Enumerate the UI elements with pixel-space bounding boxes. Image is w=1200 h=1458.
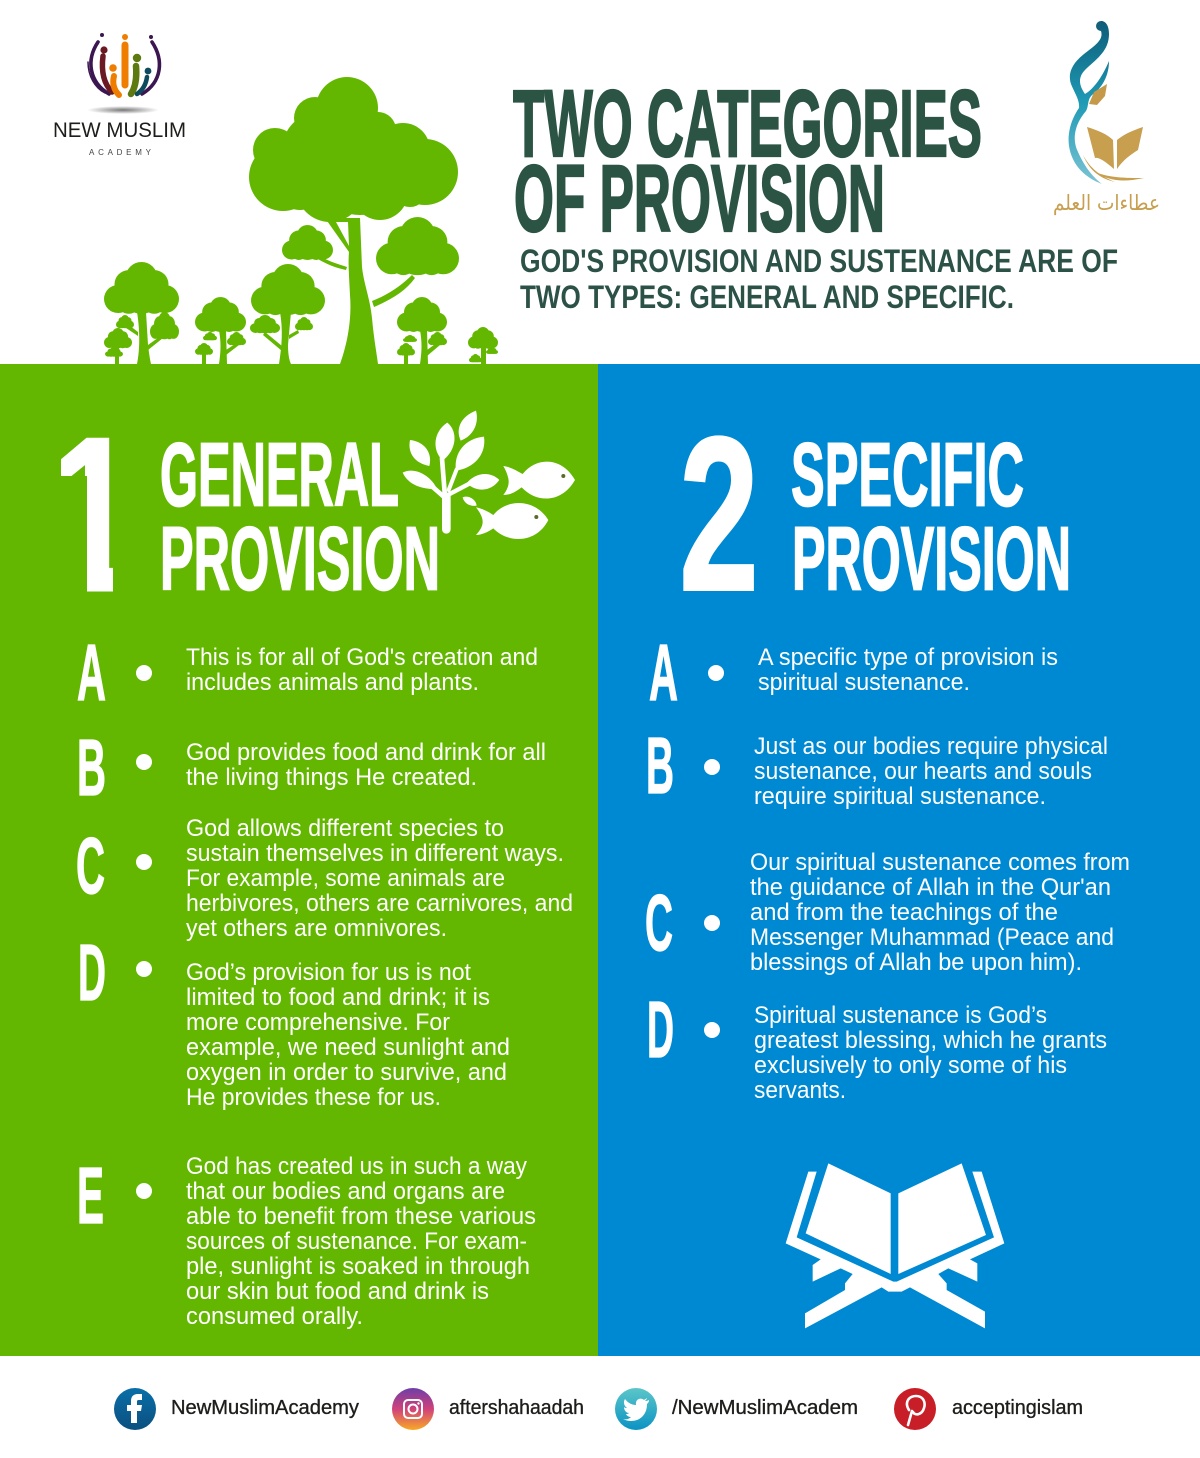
item D: He provides these for us. [186, 1084, 441, 1111]
item D: oxygen in order to survive, and [186, 1059, 507, 1086]
facebook [114, 1388, 359, 1430]
item C: and from the teachings of the [750, 899, 1058, 926]
item E: ple, sunlight is soaked in through [186, 1253, 530, 1280]
item E: able to benefit from these various [186, 1203, 536, 1230]
item E: consumed orally. [186, 1303, 363, 1330]
item B: Just as our bodies require physical [754, 733, 1108, 760]
item B: God provides food and drink for all [186, 739, 546, 766]
icon: open book on stand [786, 1163, 1004, 1328]
small tree 1 [104, 262, 179, 364]
heading: general provision: PROVISION [160, 510, 440, 610]
instagram: aftershahaadah [449, 1397, 584, 1419]
number 2: 2 [679, 391, 759, 637]
small tree 3 [250, 264, 325, 364]
item A: includes animals and plants. [186, 669, 479, 696]
small tree 5 [468, 327, 498, 364]
item A [77, 628, 538, 717]
logo shadow [87, 106, 159, 114]
item A: A [649, 628, 678, 717]
item C: sustain themselves in different ways. [186, 840, 564, 867]
item A: This is for all of God's creation and [186, 644, 538, 671]
number 1: 1 [46, 391, 140, 639]
item C: C [645, 878, 673, 967]
item C: blessings of Allah be upon him). [750, 949, 1082, 976]
item D: example, we need sunlight and [186, 1034, 510, 1061]
logo pen nib [1089, 84, 1107, 105]
heading: specific provision: SPECIFIC [791, 426, 1024, 526]
footer: social links [114, 1388, 1083, 1430]
logo calligraphy ribbon [1069, 21, 1109, 184]
illustration: trees [104, 77, 498, 364]
title line 2: OF PROVISION [514, 146, 885, 252]
item B: sustenance, our hearts and souls [754, 758, 1092, 785]
pinterest: acceptingislam [952, 1397, 1083, 1419]
item C: C [76, 821, 105, 910]
logo wordmark: NEW MUSLIM [53, 118, 186, 142]
item D: greatest blessing, which he grants [754, 1027, 1107, 1054]
facebook: NewMuslimAcademy [171, 1397, 359, 1419]
instagram [392, 1388, 584, 1430]
item D [78, 928, 510, 1111]
item C: God allows different species to [186, 815, 504, 842]
plant [403, 411, 499, 529]
logo open book [1083, 127, 1144, 182]
item C: Our spiritual sustenance comes from [750, 849, 1130, 876]
item B: require spiritual sustenance. [754, 783, 1046, 810]
item C [76, 815, 573, 942]
item C [645, 849, 1130, 976]
item B [646, 721, 1108, 810]
small tree 4 [397, 297, 447, 364]
item C: herbivores, others are carnivores, and [186, 890, 573, 917]
item A: A [77, 628, 106, 717]
logo: Ataat Al-Ilm [1053, 21, 1160, 216]
item C: the guidance of Allah in the Qur'an [750, 874, 1111, 901]
title [513, 71, 982, 252]
subtitle [520, 243, 1118, 315]
item A [649, 628, 1058, 717]
icon: people globe [88, 33, 159, 95]
twitter [615, 1388, 858, 1430]
item B: B [77, 723, 106, 812]
item D: servants. [754, 1077, 846, 1104]
item B [77, 723, 546, 812]
panel: specific provision [598, 364, 1200, 1356]
twitter: /NewMuslimAcadem [672, 1397, 858, 1419]
logo subline: ACADEMY [89, 148, 152, 157]
heading: specific provision [791, 426, 1071, 610]
main tree [249, 77, 459, 364]
item E: sources of sustenance. For exam- [186, 1228, 527, 1255]
logo: New Muslim Academy [53, 33, 186, 157]
item E [77, 1151, 536, 1330]
icon: plant and fish [403, 411, 575, 539]
item E: God has created us in such a way [186, 1153, 528, 1180]
fish 2 [476, 503, 548, 539]
item D: Spiritual sustenance is God’s [754, 1002, 1047, 1029]
pinterest [894, 1388, 1083, 1430]
item D: exclusively to only some of his [754, 1052, 1067, 1079]
fish 1 [503, 462, 575, 499]
heading: general provision: GENERAL [160, 426, 399, 526]
item E: that our bodies and organs are [186, 1178, 505, 1205]
item D [647, 985, 1107, 1104]
item A: A specific type of provision is [758, 644, 1058, 671]
item E: E [77, 1151, 104, 1240]
item C: Messenger Muhammad (Peace and [750, 924, 1114, 951]
item D: God’s provision for us is not [186, 959, 471, 986]
item B: the living things He created. [186, 764, 477, 791]
item D: limited to food and drink; it is [186, 984, 490, 1011]
item C: For example, some animals are [186, 865, 505, 892]
subtitle line 2: TWO TYPES: GENERAL AND SPECIFIC. [520, 279, 1014, 315]
item E: our skin but food and drink is [186, 1278, 489, 1305]
heading: general provision [160, 426, 440, 610]
item D: more comprehensive. For [186, 1009, 450, 1036]
item C: yet others are omnivores. [186, 915, 447, 942]
panel: general provision [0, 364, 598, 1356]
item A: spiritual sustenance. [758, 669, 970, 696]
item B: B [646, 721, 674, 810]
item D: D [78, 928, 106, 1017]
logo arabic wordmark: عطاءات العلم [1053, 191, 1160, 216]
small tree 2 [195, 297, 246, 364]
item D: D [647, 985, 674, 1074]
